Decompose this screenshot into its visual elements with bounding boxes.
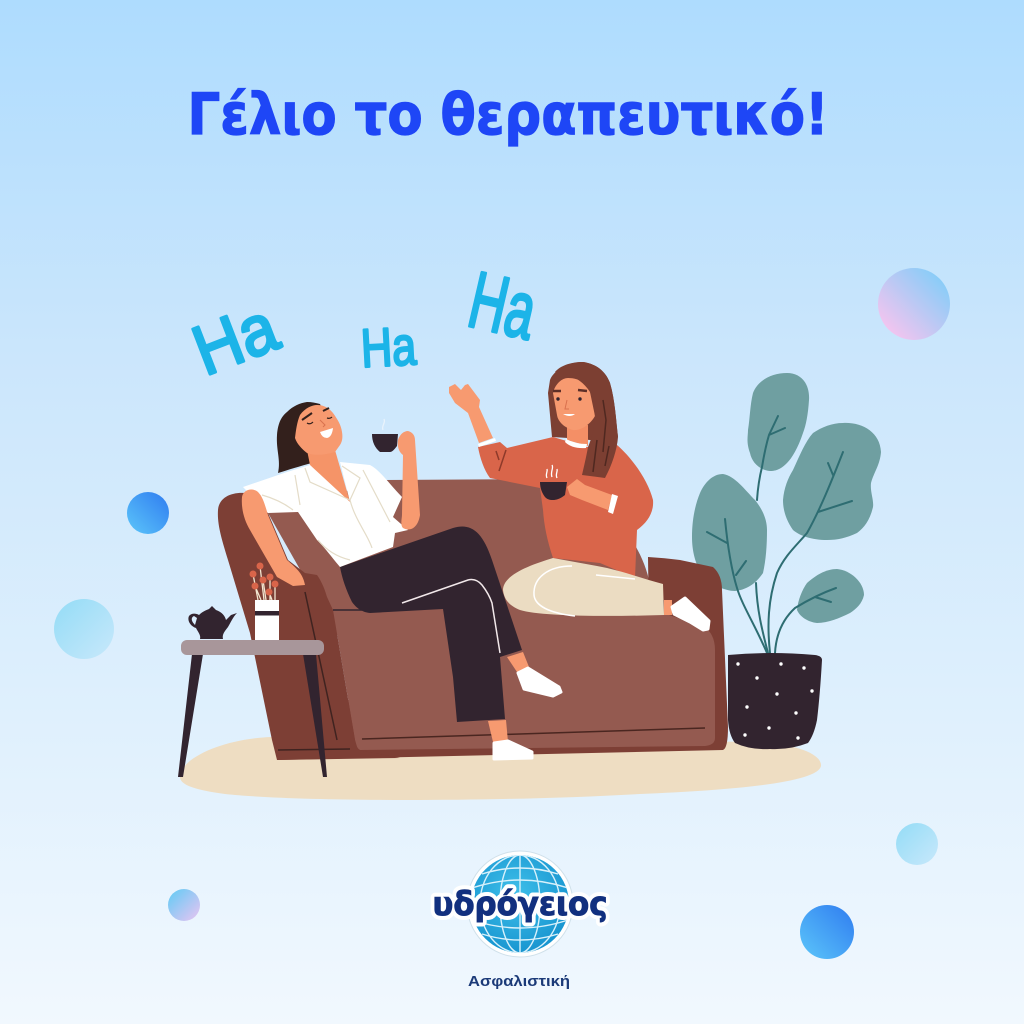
logo subtitle: Ασφαλιστική (468, 974, 570, 990)
arm on sofa (242, 490, 305, 586)
cushion seam line (362, 728, 705, 739)
cup (372, 434, 398, 452)
right arm and bottom strip (277, 557, 728, 760)
bubble: right pale (896, 823, 938, 865)
collar (565, 439, 587, 448)
hair front (555, 362, 618, 478)
sleeve cuff and folds (478, 438, 496, 447)
bubble: top right (878, 268, 950, 340)
pot (728, 653, 822, 749)
bubble: small lower left (168, 889, 200, 921)
head (295, 405, 342, 455)
raised foot (507, 652, 529, 672)
arm seam lines (278, 592, 350, 750)
forearm (567, 479, 612, 510)
raised arm (398, 431, 420, 529)
face details (302, 408, 329, 420)
trousers (503, 558, 664, 616)
cup with steam (540, 482, 567, 500)
neck (307, 450, 350, 510)
bubble: left blue (127, 492, 169, 534)
side table (178, 562, 327, 777)
sofa back (268, 479, 650, 640)
bubble: lower right blue (800, 905, 854, 959)
lower foot (488, 720, 508, 742)
teapot (188, 606, 237, 639)
globe (467, 851, 573, 957)
table legs (178, 654, 327, 777)
trousers (340, 527, 522, 722)
raised arm (449, 384, 493, 443)
bubble: left pale (54, 599, 114, 659)
stems (707, 416, 852, 653)
face details (553, 390, 587, 391)
vase with flowers (250, 562, 279, 641)
person: woman on left (242, 402, 561, 759)
logo wordmark: υδρόγειος (432, 884, 608, 923)
leaves (692, 373, 881, 623)
laughter text: Ha left: Ha (182, 287, 288, 390)
person: woman on right (449, 362, 709, 630)
sofa (218, 479, 728, 760)
sweater (478, 437, 653, 578)
shirt (243, 462, 408, 567)
logo (432, 851, 608, 990)
rug (180, 737, 821, 800)
laughter text: Ha middle: Ha (359, 316, 418, 379)
foot (664, 600, 672, 615)
table top (181, 640, 324, 655)
hair back (548, 362, 618, 440)
title: Γέλιο το θεραπευτικό! (188, 82, 828, 148)
plant (692, 373, 881, 749)
hair (277, 402, 325, 473)
neck and face (567, 425, 588, 446)
logo wordmark outline: υδρόγειος (432, 884, 608, 923)
seat cushion (333, 610, 715, 750)
laughter text: Ha right: Ha (461, 255, 545, 356)
left arm (218, 493, 400, 760)
